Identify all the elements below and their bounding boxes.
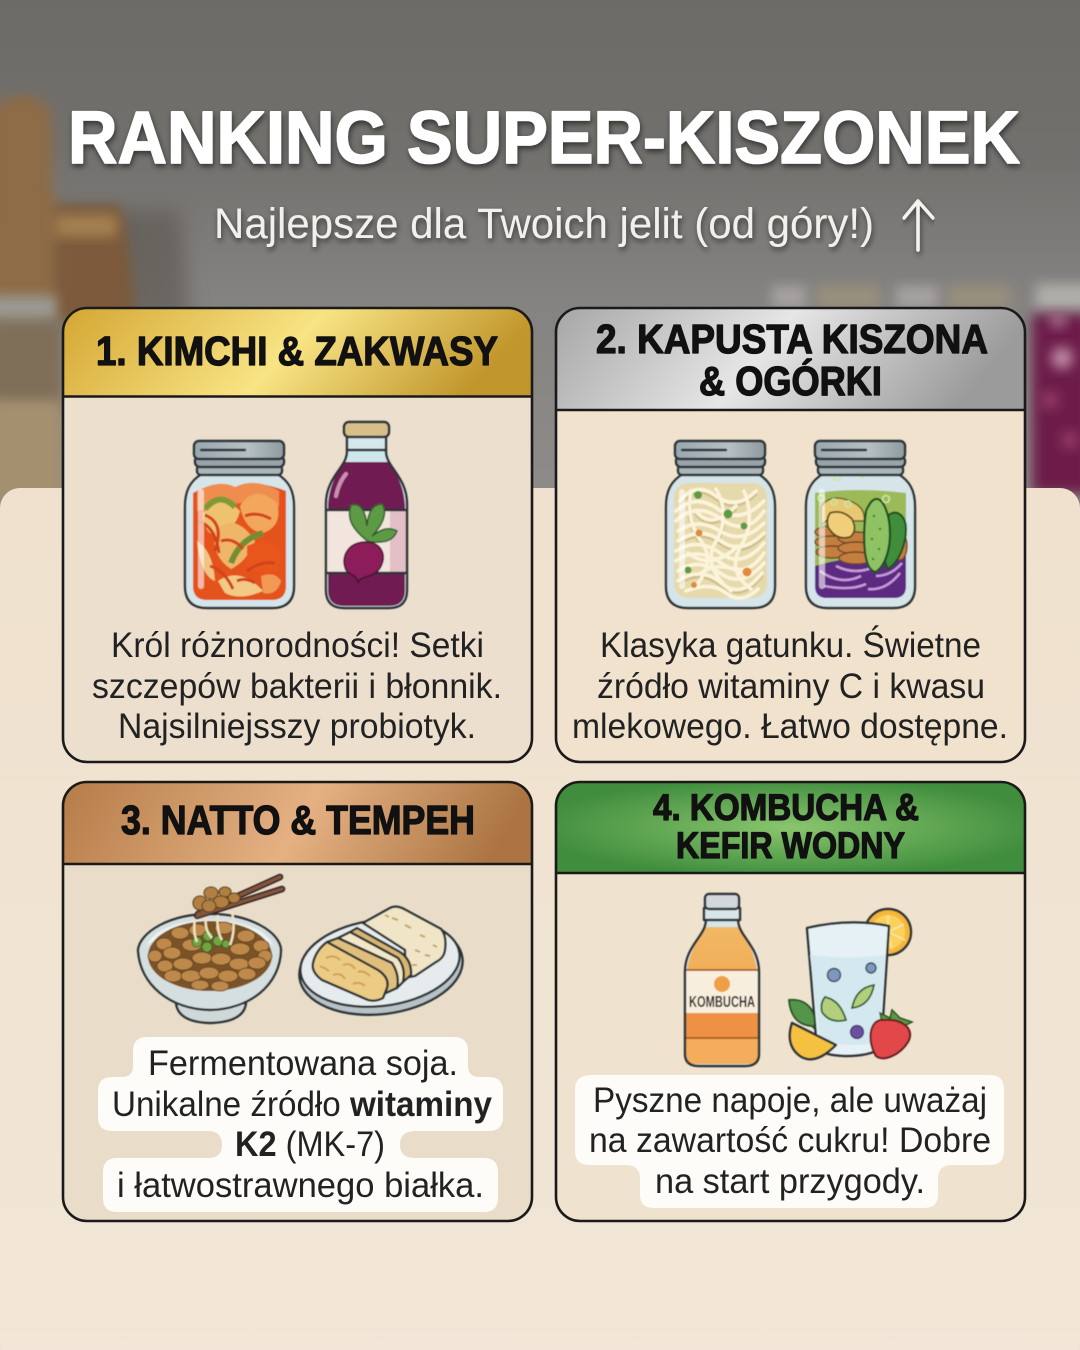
heading bar: silver: & OGÓRKI <box>699 358 882 404</box>
title: RANKING SUPER-KISZONEK <box>68 96 1020 179</box>
panel: kimchi and sourdoughs <box>63 308 532 762</box>
text: card 4 description with white highlights: Pyszne napoje, ale uważaj <box>593 1081 987 1120</box>
left jars <box>0 296 56 320</box>
heading bar: gold <box>63 308 532 396</box>
shadow behind kitchen tools <box>60 210 190 320</box>
cutting board <box>0 95 64 320</box>
text: card 1 description: szczepów bakterii i błonnik. <box>92 667 502 706</box>
icon: tempeh on plate <box>294 907 468 1024</box>
heading bar: silver: 2. KAPUSTA KISZONA <box>596 316 988 362</box>
text: card 1 description <box>92 626 502 746</box>
icon: kimchi jar <box>185 441 294 608</box>
text: card 3 description with white highlights: Fermentowana soja. <box>148 1044 458 1083</box>
purple jar <box>1036 284 1080 310</box>
icon: natto bowl <box>138 877 282 1023</box>
icon: beet juice bottle <box>326 422 407 608</box>
heading bar: green: 4. KOMBUCHA & <box>653 787 919 828</box>
icon: up arrow <box>904 201 933 250</box>
icon: water kefir glass with fruit <box>789 909 912 1059</box>
text: card 3 description with white highlights: K2 (MK-7) <box>235 1125 385 1164</box>
text: card 4 description with white highlights: na start przygody. <box>655 1162 925 1201</box>
text: card 4 description with white highlights: na zawartość cukru! Dobre <box>589 1121 991 1160</box>
heading bar: gold: 1. KIMCHI & ZAKWASY <box>96 328 498 374</box>
icon: pickles jar <box>806 441 915 608</box>
text: card 1 description: Król różnorodności! Setki <box>111 626 484 665</box>
heading bar: green <box>556 782 1025 873</box>
text: card 2 description <box>572 625 1008 746</box>
heading bar: bronze <box>63 782 532 864</box>
text: card 2 description: Klasyka gatunku. Świetne <box>600 625 981 665</box>
panel: kombucha and water kefir <box>556 782 1025 1221</box>
background: cream counter <box>0 488 1080 1350</box>
pepper mill <box>55 205 136 320</box>
heading bar: bronze: 3. NATTO & TEMPEH <box>121 797 475 843</box>
icon: kombucha bottle: KOMBUCHA <box>689 994 755 1011</box>
text: card 3 description with white highlights <box>98 1037 503 1212</box>
text: card 3 description with white highlights: Unikalne źródło witaminy <box>112 1085 493 1124</box>
icon: kombucha bottle <box>685 894 759 1066</box>
icon: sauerkraut jar <box>666 441 775 608</box>
text: card 2 description: mlekowego. Łatwo dostępne. <box>572 707 1008 746</box>
panel: sauerkraut and pickles <box>556 308 1025 762</box>
heading bar: green: KEFIR WODNY <box>676 825 905 866</box>
shelf jars <box>772 286 806 308</box>
subtitle: Najlepsze dla Twoich jelit (od góry!) <box>214 200 874 248</box>
panel: natto and tempeh <box>63 782 532 1221</box>
text: card 4 description with white highlights <box>575 1075 1004 1208</box>
heading bar: silver <box>556 308 1025 410</box>
text: card 1 description: Najsilniejsszy probiotyk. <box>118 707 476 746</box>
text: card 2 description: źródło witaminy C i kwasu <box>597 667 985 706</box>
text: card 3 description with white highlights: i łatwostrawnego białka. <box>117 1166 484 1205</box>
